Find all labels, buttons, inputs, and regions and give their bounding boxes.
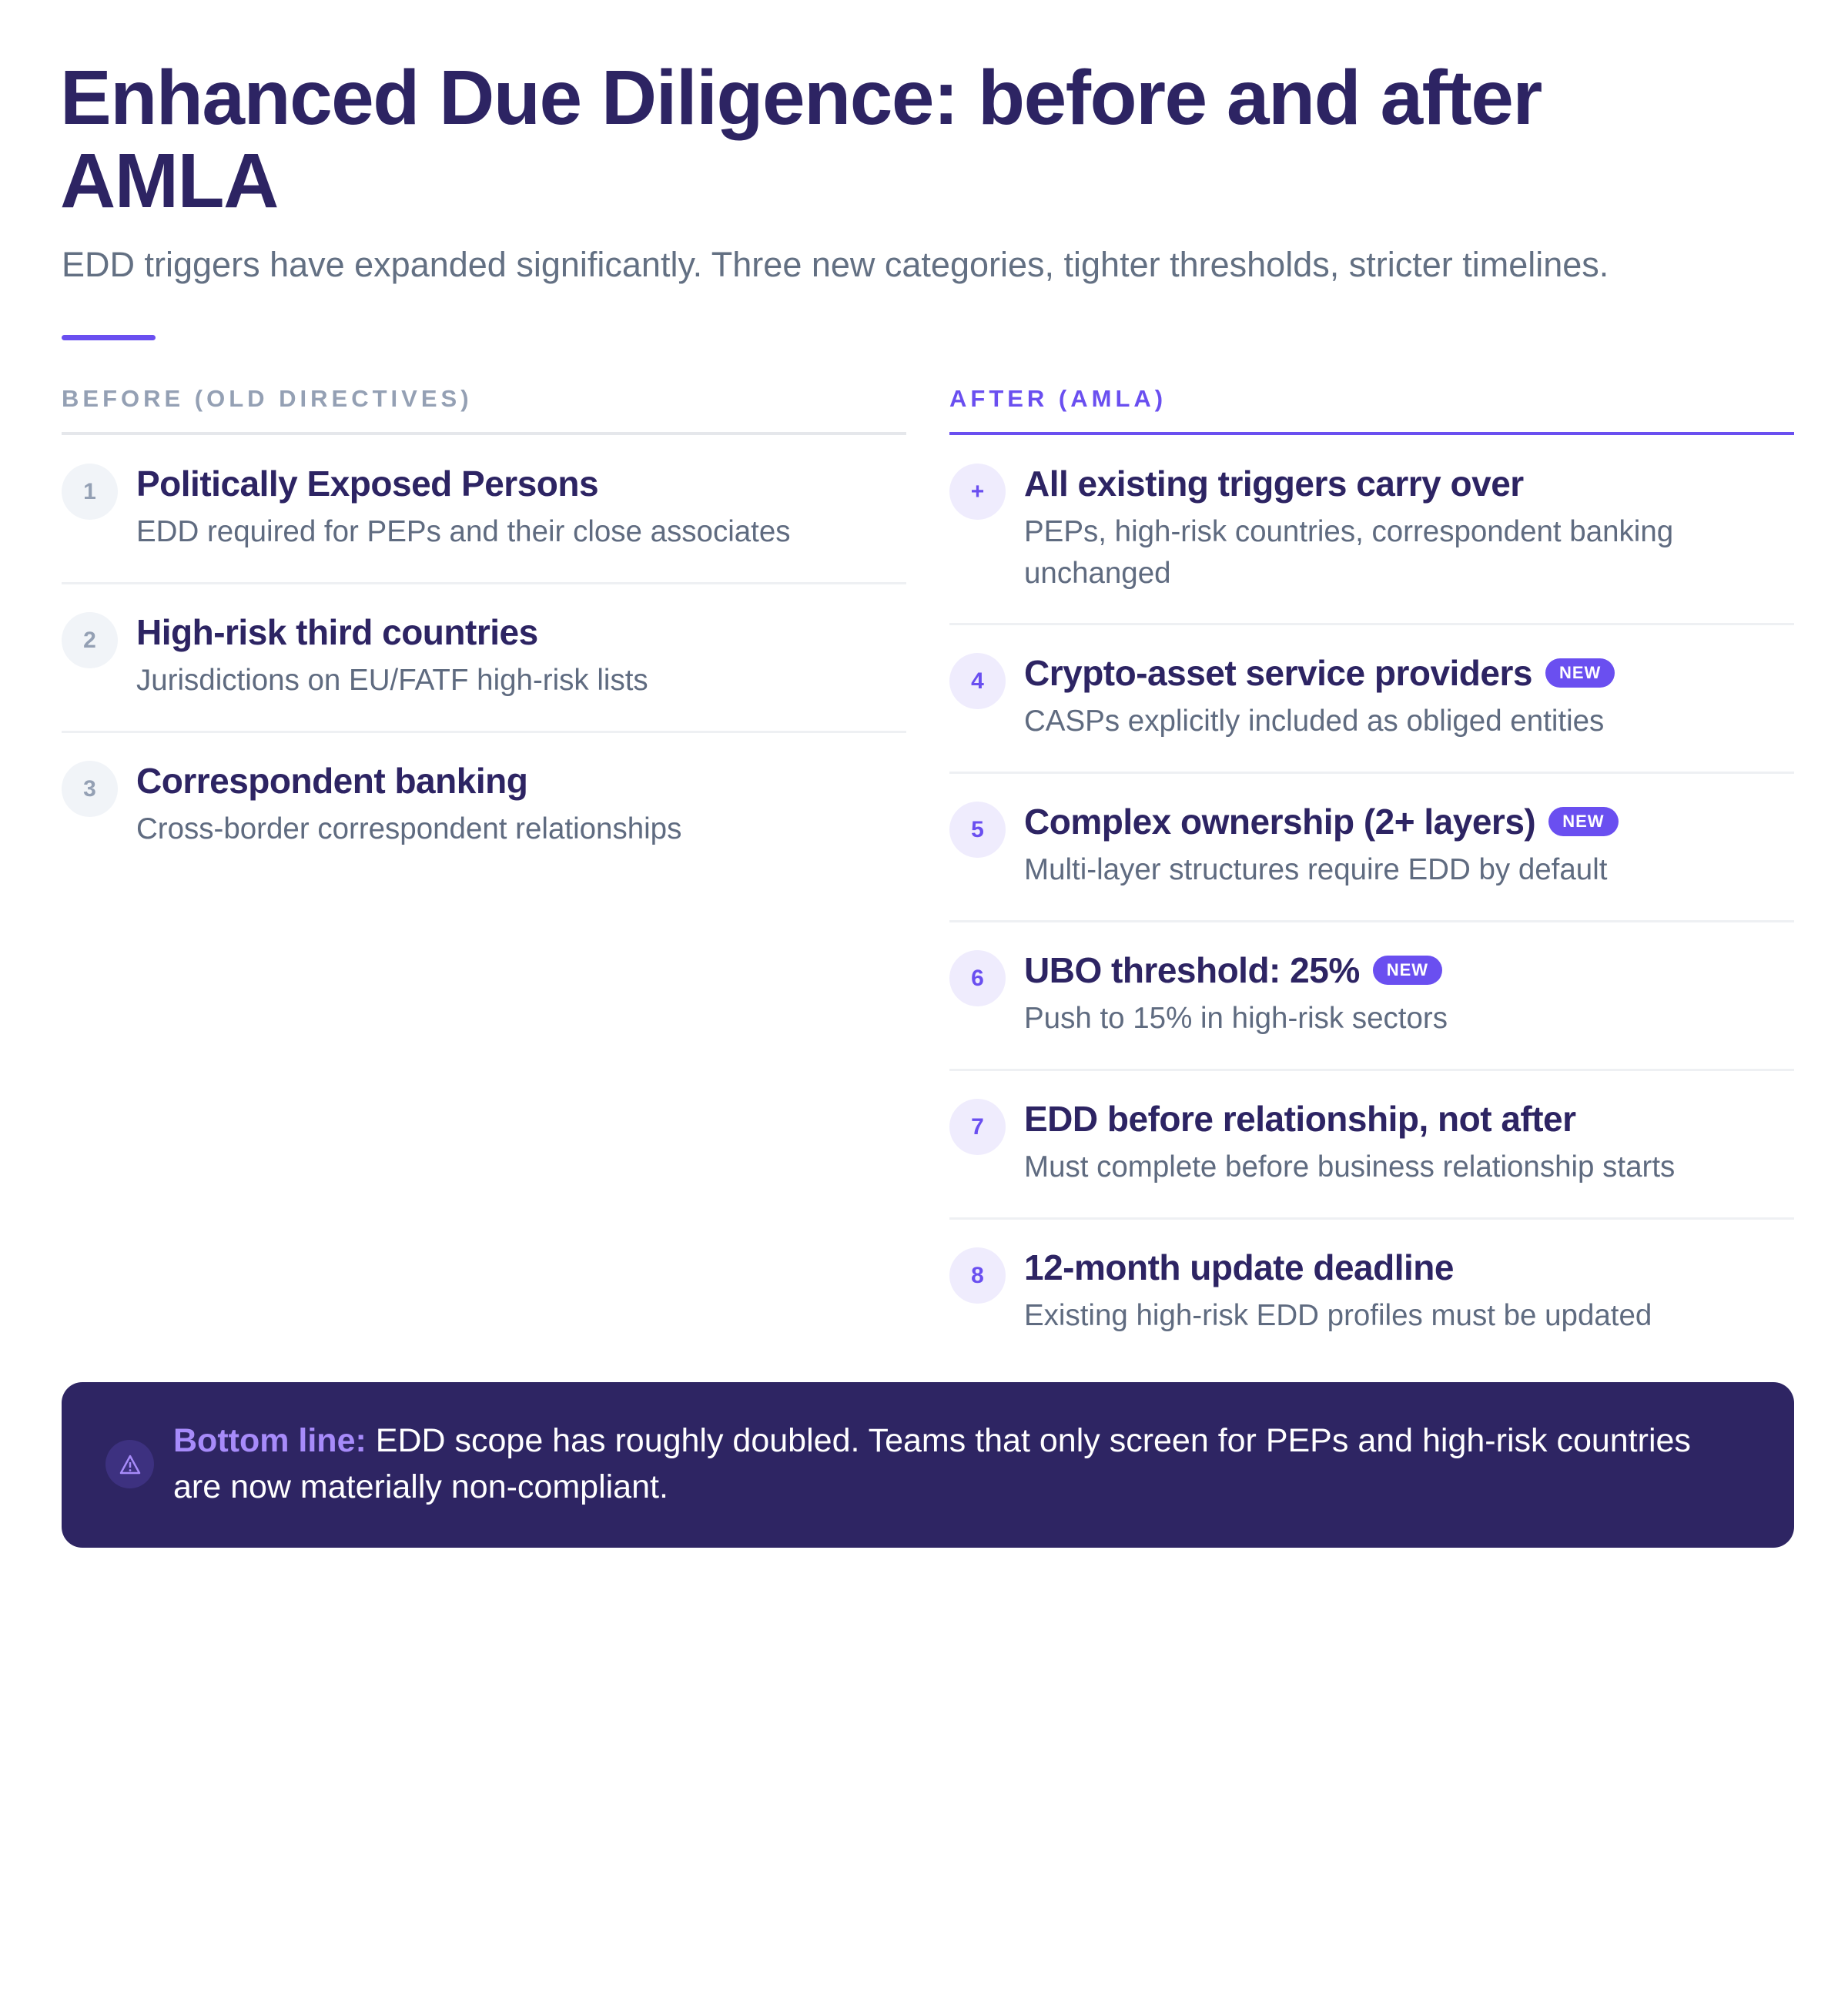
panel: before: Politically Exposed Persons bbox=[136, 464, 598, 504]
panel: after: PEPs, high-risk countries, correspondent banking unchanged bbox=[1024, 515, 1673, 590]
panel: before: 1 bbox=[83, 479, 96, 504]
subtitle: EDD triggers have expanded significantly. Three new categories, tighter thresholds, stricter timelines. bbox=[62, 245, 1609, 284]
item 8 bbox=[949, 1247, 1652, 1332]
title: AMLA bbox=[60, 138, 278, 224]
item 3 bbox=[62, 761, 681, 845]
panel: after: CASPs explicitly included as obliged entities bbox=[1024, 705, 1604, 738]
panel: after bbox=[949, 385, 1794, 1332]
panel: before: Jurisdictions on EU/FATF high-risk lists bbox=[136, 664, 648, 697]
panel: before: Correspondent banking bbox=[136, 761, 527, 801]
panel: after: 4 bbox=[971, 668, 984, 693]
title: Enhanced Due Diligence: before and after bbox=[60, 55, 1542, 141]
callout: bottom line bbox=[62, 1382, 1794, 1548]
panel: after: + bbox=[971, 479, 984, 504]
panel: after: 5 bbox=[971, 816, 984, 842]
heading: after: AFTER (AMLA) bbox=[949, 385, 1167, 412]
panel: before: EDD required for PEPs and their close associates bbox=[136, 515, 791, 548]
panel: after: Multi-layer structures require EDD by default bbox=[1024, 853, 1607, 886]
heading: before: BEFORE (OLD DIRECTIVES) bbox=[62, 385, 473, 412]
panel: after: NEW bbox=[1387, 960, 1428, 979]
panel: before: High-risk third countries bbox=[136, 612, 538, 652]
icon: warning bbox=[105, 1440, 154, 1488]
item 5 bbox=[949, 802, 1619, 886]
panel: before bbox=[62, 385, 906, 845]
panel: before: Cross-border correspondent relationships bbox=[136, 812, 681, 845]
panel: after: UBO threshold: 25% bbox=[1024, 950, 1360, 990]
callout text: Bottom line: EDD scope has roughly doubled. Teams that only screen for PEPs and high-risk countries are now materially non-compliant. bbox=[173, 1422, 1691, 1505]
panel: before: 2 bbox=[83, 627, 96, 653]
panel: after: NEW bbox=[1562, 812, 1605, 831]
panel: after: NEW bbox=[1559, 663, 1601, 682]
panel: after: Must complete before business relationship starts bbox=[1024, 1150, 1675, 1183]
panel: after: Push to 15% in high-risk sectors bbox=[1024, 1002, 1448, 1035]
panel: after: 6 bbox=[971, 966, 984, 990]
panel: after: 12-month update deadline bbox=[1024, 1247, 1454, 1287]
panel: before: 3 bbox=[83, 776, 96, 801]
item 2 bbox=[62, 612, 648, 697]
panel: after: Complex ownership (2+ layers) bbox=[1024, 802, 1535, 842]
item: carry over bbox=[949, 464, 1673, 590]
panel: after: 8 bbox=[971, 1263, 984, 1287]
panel: after: Crypto-asset service providers bbox=[1024, 653, 1532, 693]
item 1 bbox=[62, 464, 791, 548]
item 6 bbox=[949, 950, 1448, 1035]
item 7 bbox=[949, 1099, 1675, 1183]
panel: after: Existing high-risk EDD profiles must be updated bbox=[1024, 1299, 1652, 1332]
panel: after: 7 bbox=[971, 1113, 984, 1140]
panel: after: All existing triggers carry over bbox=[1024, 464, 1524, 504]
title bbox=[60, 55, 1542, 224]
panel: after: EDD before relationship, not after bbox=[1024, 1099, 1576, 1139]
item 4 bbox=[949, 653, 1615, 738]
